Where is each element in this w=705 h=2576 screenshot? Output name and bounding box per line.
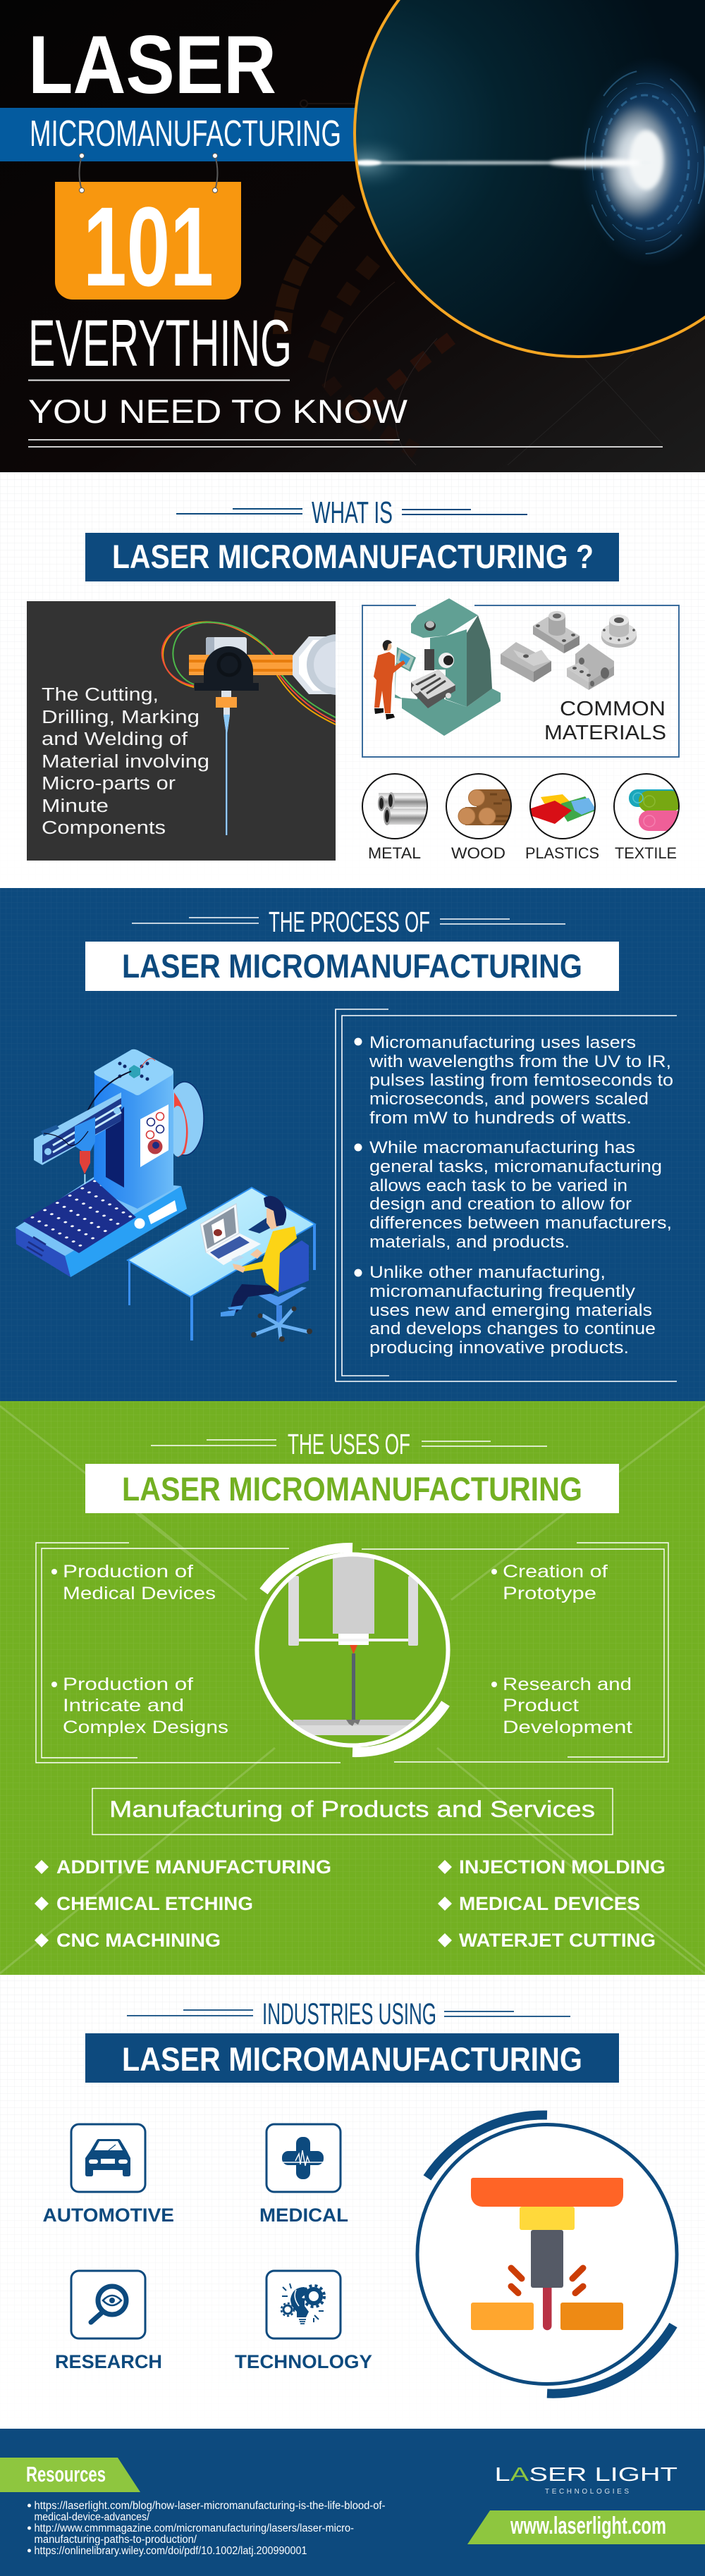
- title: LASER: LASER: [28, 18, 276, 111]
- banner: laser micromanufacturing?: [85, 533, 619, 581]
- banner: LASER MICROMANUFACTURING: [122, 947, 582, 985]
- resources list: [27, 2500, 385, 2557]
- logo: laser light technologies: [495, 2463, 678, 2496]
- laptop: [200, 1204, 261, 1265]
- panel: definition: [27, 601, 367, 861]
- use: research and development: Development: [503, 1718, 632, 1737]
- frames around uses: [36, 1543, 668, 1763]
- definition text: Minute: [42, 796, 109, 816]
- process bullet 3: and develops changes to continue: [369, 1319, 656, 1338]
- section: industries: [0, 1975, 705, 2429]
- process bullet 3: micromanufacturing frequently: [369, 1282, 635, 1301]
- website tag: [467, 2510, 705, 2544]
- definition text: Material involving: [42, 752, 209, 772]
- text: common materials: COMMON: [560, 698, 666, 720]
- illustration: laser nozzle in circle: [257, 1548, 448, 1752]
- process bullet 3: Unlike other manufacturing,: [369, 1263, 606, 1282]
- red spool: [166, 1082, 204, 1157]
- top connectors: [118, 1061, 149, 1081]
- list: processes left: CHEMICAL ETCHING: [56, 1893, 253, 1914]
- use: intricate designs: [51, 1675, 228, 1737]
- process bullet 1: with wavelengths from the UV to IR,: [369, 1052, 671, 1071]
- banner: LASER MICROMANUFACTURING: [122, 2040, 582, 2078]
- perforated work plate: [23, 1179, 136, 1253]
- list: processes right: INJECTION MOLDING: [459, 1856, 666, 1878]
- resources tag: Resources: [26, 2462, 106, 2486]
- process bullet 3: producing innovative products.: [369, 1338, 629, 1357]
- resources list: https://laserlight.com/blog/how-laser-micromanufacturing-is-the-life-blood-of-: [34, 2500, 385, 2512]
- process bullet 1: pulses lasting from femtoseconds to: [369, 1071, 673, 1090]
- operator: [221, 1196, 297, 1317]
- resources tag: [0, 2458, 140, 2492]
- material: wood: WOOD: [451, 844, 505, 862]
- section: the uses: [0, 1401, 705, 1975]
- illustration: laser cutting circle: [417, 2115, 677, 2393]
- subheading box: products and services: Manufacturing of Products and Services: [109, 1797, 595, 1822]
- section: the process: [0, 888, 705, 1402]
- laser orb: [317, 0, 705, 357]
- blue title bar: [0, 108, 355, 161]
- use: prototype: [491, 1562, 608, 1603]
- part: flanged ring: [601, 615, 637, 648]
- chair: [245, 1240, 312, 1342]
- worker: [374, 640, 405, 720]
- banner: [85, 1464, 619, 1513]
- material: plastics: PLASTICS: [525, 844, 599, 862]
- arm: [34, 1092, 121, 1227]
- process bullet 2: design and creation to allow for: [369, 1195, 632, 1214]
- material: metal: METAL: [368, 844, 421, 862]
- heading: the uses of: [151, 1428, 547, 1460]
- list: processes right: [438, 1856, 666, 1951]
- list: processes right: WATERJET CUTTING: [459, 1930, 656, 1951]
- material: metal: [362, 774, 431, 862]
- definition text: and Welding of: [42, 729, 188, 749]
- use: prototype: Creation of: [503, 1562, 608, 1582]
- process bullet 1: from mW to hundreds of watts.: [369, 1109, 632, 1128]
- title: MICROMANUFACTURING: MICROMANUFACTURING: [30, 113, 341, 154]
- text: common materials: MATERIALS: [544, 722, 666, 744]
- desk: [128, 1188, 316, 1341]
- machine base: [16, 1177, 187, 1277]
- banner: [85, 942, 619, 991]
- material: wood: [446, 774, 515, 862]
- footer: [0, 2429, 705, 2576]
- industry: automotive: [42, 2124, 174, 2226]
- industry: medical: MEDICAL: [259, 2205, 348, 2226]
- use: research and development: Research and: [503, 1675, 632, 1694]
- industry: medical: [259, 2124, 348, 2226]
- use: medical devices: Medical Devices: [63, 1584, 216, 1603]
- resources list: http://www.cmmmagazine.com/micromanufacturing/lasers/laser-micro-: [34, 2522, 354, 2534]
- illustration: laser machine: [16, 1049, 316, 1342]
- heading: the process of: [132, 906, 565, 938]
- definition text: Micro-parts or: [42, 774, 176, 794]
- material: textile: [614, 774, 685, 862]
- header banner: [0, 0, 705, 472]
- heading: what is: [176, 495, 527, 530]
- resources list: manufacturing-paths-to-production/: [34, 2534, 197, 2546]
- process bullet 1: microseconds, and powers scaled: [369, 1090, 649, 1109]
- heading: the process of: THE PROCESS OF: [269, 906, 430, 938]
- industry: research: [55, 2271, 162, 2372]
- resources list: medical-device-advances/: [34, 2511, 150, 2523]
- process text frame: [336, 1009, 677, 1381]
- list: processes left: ADDITIVE MANUFACTURING: [56, 1856, 331, 1878]
- banner: LASER MICROMANUFACTURING: [122, 1470, 582, 1508]
- column: [94, 1049, 173, 1209]
- process bullet 1: Micromanufacturing uses lasers: [369, 1033, 636, 1052]
- process bullet 3: uses new and emerging materials: [369, 1301, 652, 1320]
- process bullet 1: [354, 1033, 673, 1128]
- definition text: Drilling, Marking: [42, 708, 200, 727]
- use: medical devices: [51, 1562, 216, 1603]
- process bullet 2: differences between manufacturers,: [369, 1214, 672, 1233]
- industry: research: RESEARCH: [55, 2351, 162, 2372]
- list: processes right: MEDICAL DEVICES: [459, 1893, 640, 1914]
- material: plastics: [525, 774, 599, 862]
- use: prototype: Prototype: [503, 1584, 596, 1603]
- process bullet 2: materials, and products.: [369, 1233, 570, 1252]
- use: research and development: Product: [503, 1696, 579, 1715]
- definition text: The Cutting,: [42, 685, 159, 705]
- title: EVERYTHING: EVERYTHING: [28, 306, 292, 380]
- part: bracket with boss: [533, 611, 580, 653]
- list: processes left: [35, 1856, 331, 1951]
- subheading box: products and services: [92, 1789, 613, 1835]
- logo: laser light technologies: TECHNOLOGIES: [545, 2488, 629, 2496]
- hanging tag: 101: 101: [83, 183, 214, 309]
- poster: [140, 1104, 168, 1167]
- material: textile: TEXTILE: [615, 844, 677, 862]
- process bullet 2: allows each task to be varied in: [369, 1176, 627, 1195]
- heading: industries using: INDUSTRIES USING: [262, 1997, 436, 2031]
- process bullet 2: general tasks, micromanufacturing: [369, 1157, 662, 1176]
- use: intricate designs: Complex Designs: [63, 1718, 228, 1737]
- process bullet 2: [354, 1138, 672, 1252]
- industry: technology: [235, 2271, 372, 2372]
- heading: the uses of: THE USES OF: [288, 1428, 410, 1460]
- use: intricate designs: Production of: [63, 1675, 193, 1694]
- process bullet 2: While macromanufacturing has: [369, 1138, 635, 1157]
- process bullet 3: [354, 1263, 656, 1357]
- heading: what is: WHAT IS: [312, 495, 393, 530]
- heading: industries using: [127, 1997, 570, 2031]
- part: machined block: [567, 643, 614, 690]
- illustration: milling machine and worker: [374, 598, 501, 736]
- use: research and development: [491, 1675, 632, 1737]
- section: what is laser micromanufacturing: [0, 472, 705, 888]
- illustration: metal parts: [501, 611, 637, 690]
- industry: automotive: AUTOMOTIVE: [42, 2205, 174, 2226]
- banner: laser micromanufacturing?: LASER MICROMANUFACTURING ?: [112, 538, 594, 575]
- definition text: Components: [42, 818, 166, 838]
- part: slotted block: [501, 642, 551, 682]
- hanging tag: 101: [55, 154, 241, 309]
- use: medical devices: Production of: [63, 1562, 193, 1582]
- use: intricate designs: Intricate and: [63, 1696, 184, 1715]
- icon: laser head: [161, 622, 336, 835]
- dim mechanical background decoration: [282, 100, 663, 465]
- banner: [85, 2033, 619, 2083]
- industry: technology: TECHNOLOGY: [235, 2351, 372, 2372]
- panel: common materials: [362, 598, 679, 757]
- text: common materials: [544, 698, 666, 744]
- resources list: https://onlinelibrary.wiley.com/doi/pdf/10.1002/latj.200990001: [34, 2545, 307, 2557]
- list: processes left: CNC MACHINING: [56, 1930, 221, 1951]
- definition text: [42, 685, 209, 838]
- title: YOU NEED TO KNOW: YOU NEED TO KNOW: [28, 393, 408, 430]
- logo: laser light technologies: LA SER LIGHT: [495, 2463, 678, 2485]
